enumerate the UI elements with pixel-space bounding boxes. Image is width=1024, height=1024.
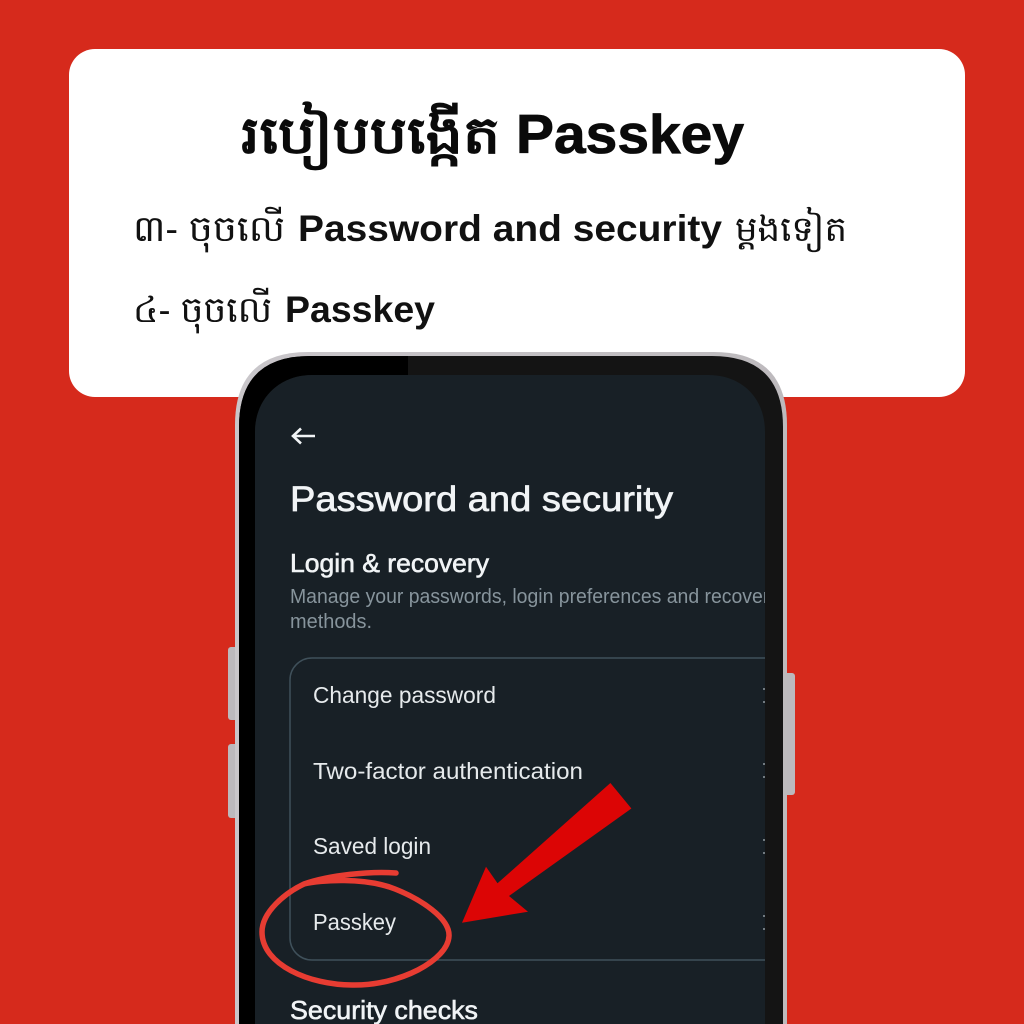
- title: [241, 101, 744, 171]
- step 3 text: ម្តងទៀត: [735, 206, 847, 253]
- section heading: login and recovery: Login & recovery: [290, 548, 489, 578]
- section description: Manage your passwords, login preferences and recovery: [290, 586, 779, 608]
- list items: Change password: [313, 682, 496, 708]
- back arrow icon: [293, 428, 315, 444]
- title: របៀបបង្កើត: [241, 101, 500, 171]
- list items: Passkey: [313, 909, 396, 935]
- red hand-drawn circle around Passkey: [262, 872, 449, 985]
- step 4 text: [133, 287, 435, 334]
- panel: instructions card: [69, 49, 965, 397]
- step 4 text: Passkey: [285, 289, 435, 330]
- step 3 text: Password and security: [298, 208, 722, 249]
- section description: methods.: [290, 611, 372, 633]
- section description: [291, 588, 765, 628]
- settings list box: [290, 658, 810, 960]
- screen heading: Password and security: [290, 480, 674, 519]
- title: Passkey: [516, 103, 744, 165]
- step 4 text: ៤- ចុចលើ: [133, 287, 272, 334]
- phone frame: [235, 352, 787, 1024]
- list items: Two-factor authentication: [313, 758, 583, 784]
- list chevrons: [763, 688, 765, 930]
- phone screen: [255, 375, 810, 1024]
- list items: [313, 682, 583, 935]
- step 3 text: ៣- ចុចលើ: [133, 206, 285, 253]
- step 3 text: [133, 206, 847, 253]
- phone side buttons: [228, 647, 795, 818]
- red arrow pointing at Passkey: [462, 783, 631, 923]
- phone mockup: [228, 352, 810, 1024]
- list items: Saved login: [313, 833, 431, 859]
